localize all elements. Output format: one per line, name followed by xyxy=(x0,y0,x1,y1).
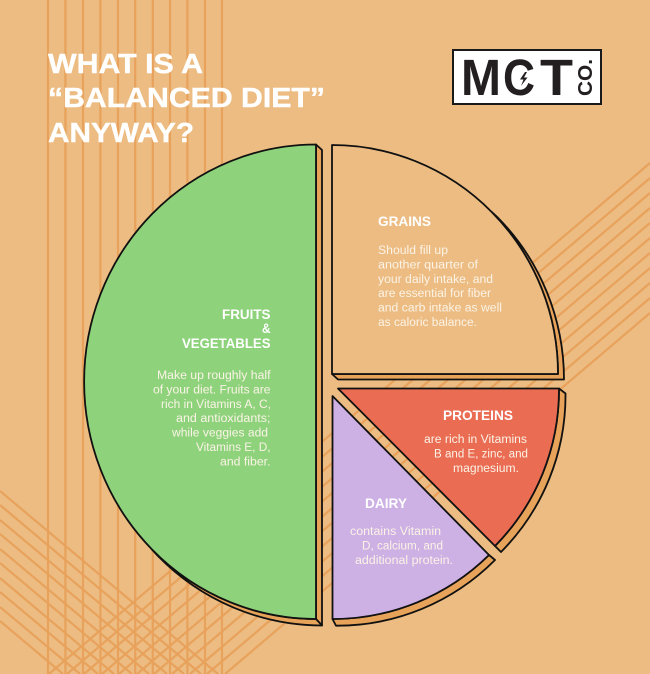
text: proteins description: B and E, zinc, and xyxy=(434,448,528,460)
title xyxy=(48,48,325,148)
text: fruits and vegetables description: and antioxidants; xyxy=(176,413,270,425)
text: grains description: as caloric balance. xyxy=(378,317,477,329)
panel: grains wedge xyxy=(332,145,564,380)
text: fruits and vegetables description: rich in Vitamins A, C, xyxy=(161,399,271,411)
text: grains description: your daily intake, and xyxy=(378,274,493,286)
text: fruits and vegetables description: Make up roughly half xyxy=(157,370,271,382)
text: dairy description xyxy=(350,526,453,567)
text: proteins description xyxy=(424,434,528,475)
text: fruits and vegetables description: while veggies add xyxy=(171,428,268,440)
heading: fruits and vegetables: FRUITS xyxy=(222,307,270,322)
title: “BALANCED DIET” xyxy=(48,82,325,113)
text: grains description xyxy=(378,245,502,329)
text: grains description: and carb intake as well xyxy=(378,303,502,315)
logo: MCT Co.: M xyxy=(461,49,501,106)
text: dairy description: contains Vitamin xyxy=(350,526,441,538)
logo: MCT Co. xyxy=(453,49,601,106)
text: proteins description: magnesium. xyxy=(453,463,519,475)
text: proteins description: are rich in Vitamins xyxy=(424,434,527,446)
logo: MCT Co.: CO. xyxy=(575,59,597,96)
logo: MCT Co.: C xyxy=(503,49,535,106)
text: dairy description: D, calcium, and xyxy=(362,540,443,552)
heading: fruits and vegetables: VEGETABLES xyxy=(182,336,270,351)
text: fruits and vegetables description xyxy=(153,370,271,468)
text: fruits and vegetables description: Vitamins E, D, xyxy=(196,442,270,454)
text: fruits and vegetables description: and fiber. xyxy=(220,456,270,468)
heading: fruits and vegetables xyxy=(182,307,271,351)
title: WHAT IS A xyxy=(48,48,203,79)
panel: dairy wedge xyxy=(332,396,495,626)
text: grains description: Should fill up xyxy=(378,245,448,257)
panel: fruits and vegetables wedge xyxy=(84,144,322,626)
heading: dairy: DAIRY xyxy=(365,496,407,511)
text: fruits and vegetables description: of your diet. Fruits are xyxy=(153,384,270,396)
heading: grains: GRAINS xyxy=(378,214,431,229)
heading: proteins: PROTEINS xyxy=(443,408,513,423)
heading: fruits and vegetables: & xyxy=(262,321,271,336)
logo: MCT Co.: T xyxy=(540,49,573,106)
panel: proteins wedge xyxy=(338,388,566,552)
text: grains description: are essential for fiber xyxy=(378,288,491,300)
text: dairy description: additional protein. xyxy=(355,555,453,567)
text: grains description: another quarter of xyxy=(378,259,479,271)
title: ANYWAY? xyxy=(48,117,194,148)
